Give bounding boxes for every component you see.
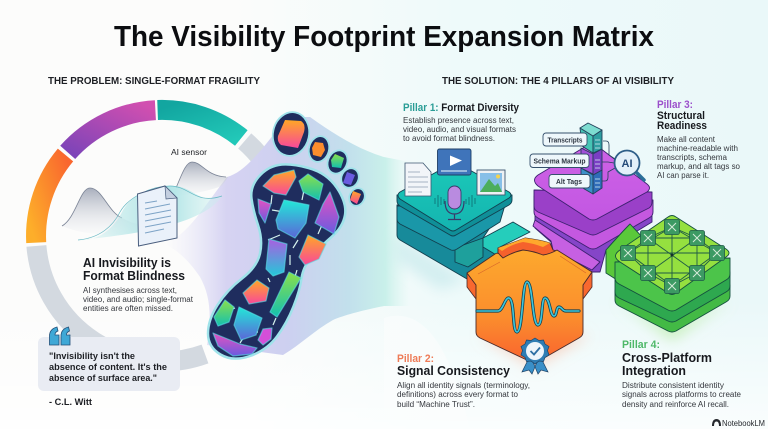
icon: stacked servers bbox=[580, 123, 602, 194]
pillar 2 text: definitions) across every format to bbox=[397, 390, 519, 399]
icon: AI magnifier: AI bbox=[622, 158, 632, 170]
text: AI invisibility description: entities are often missed. bbox=[83, 304, 173, 313]
green rear shelf bbox=[606, 224, 645, 285]
icon: video player bbox=[438, 149, 471, 175]
green top face bbox=[616, 216, 729, 294]
pillar 1 text bbox=[403, 102, 519, 143]
heading: the solution: THE SOLUTION: THE 4 PILLARS OF AI VISIBILITY bbox=[442, 76, 674, 87]
text: AI invisibility description: AI synthesises across text, bbox=[83, 286, 177, 295]
light beam through footprint bbox=[163, 117, 410, 355]
title: The Visibility Footprint Expansion Matrix bbox=[114, 21, 654, 53]
pillar 4 text: Pillar 4: bbox=[622, 339, 660, 351]
icon: text document bbox=[405, 163, 431, 196]
pillar 4 text: signals across platforms to create bbox=[622, 390, 742, 399]
teal top face bbox=[398, 163, 511, 231]
pillar 4 text: Integration bbox=[622, 363, 686, 378]
label: transcripts: Transcripts bbox=[548, 136, 583, 144]
purple layer bbox=[534, 196, 653, 249]
heading: AI invisibility bbox=[83, 255, 185, 283]
icon: verification badge bbox=[521, 338, 549, 374]
pillar 1 text: Establish presence across text, bbox=[403, 116, 514, 125]
icon: image bbox=[477, 170, 505, 195]
orange arched block bbox=[498, 238, 557, 262]
pillar 2 text: build “Machine Trust”. bbox=[397, 400, 475, 409]
pillar 1 text: Pillar 1: Format Diversity bbox=[403, 102, 519, 114]
pillar 3: data stack and labels bbox=[530, 123, 644, 194]
pillar 4 text: density and reinforce AI recall. bbox=[622, 400, 729, 409]
foot sole bbox=[208, 164, 345, 359]
pillar 3 text: Make all content bbox=[657, 135, 716, 144]
pillar 3 text: markup, and alt tags so bbox=[657, 162, 741, 171]
icon: quote marks bbox=[50, 327, 70, 345]
soft glows beneath platforms bbox=[397, 235, 730, 368]
pillar 1 text: to avoid format blindness. bbox=[403, 134, 495, 143]
pillar 1 text: video, audio, and visual formats bbox=[403, 125, 516, 134]
quote attribution: - C.L. Witt bbox=[49, 397, 92, 407]
text: AI invisibility description: video, and audio; single-format bbox=[83, 295, 194, 304]
foot toes bbox=[269, 109, 368, 208]
purple shelf bbox=[533, 220, 600, 270]
pillar 1 icons bbox=[405, 149, 505, 220]
teal upper rim bbox=[397, 195, 512, 236]
pillar 2 text bbox=[397, 353, 530, 409]
teal side panel bbox=[455, 238, 483, 267]
pillar 4 network graph bbox=[620, 220, 724, 294]
pillar 3 text: transcripts, schema bbox=[657, 153, 728, 162]
AI sensor waveforms bbox=[62, 162, 228, 240]
panel: quote: absence of surface area." bbox=[49, 373, 157, 383]
pillar 3 text: Readiness bbox=[657, 120, 707, 132]
pillar 3 platform: purple stack bbox=[533, 144, 653, 272]
pillar 3 text bbox=[657, 99, 741, 180]
orange side tabs bbox=[467, 272, 592, 299]
connectors bbox=[225, 190, 322, 343]
pillar 4 text: Cross-Platform bbox=[622, 350, 712, 365]
panel: quote bbox=[38, 327, 180, 391]
foot blocks bbox=[213, 170, 339, 356]
icon: microphone bbox=[435, 186, 475, 220]
purple base bbox=[535, 205, 652, 272]
label: alt tags: Alt Tags bbox=[556, 177, 582, 186]
label: schema markup: Schema Markup bbox=[534, 156, 586, 166]
pillar 2 text: Pillar 2: bbox=[397, 353, 434, 365]
heading: the problem: THE PROBLEM: SINGLE-FORMAT FRAGILITY bbox=[48, 76, 260, 87]
orange hexagon face bbox=[467, 250, 592, 363]
NotebookLM watermark: NotebookLM bbox=[722, 419, 765, 428]
purple top face bbox=[534, 144, 650, 220]
text: AI invisibility description bbox=[83, 286, 194, 313]
label: AI sensor: AI sensor bbox=[171, 148, 207, 157]
panel: quote: "Invisibility isn't the bbox=[49, 351, 135, 361]
heading: AI invisibility: AI Invisibility is bbox=[83, 255, 171, 270]
panel: quote: absence of content. It's the bbox=[49, 362, 167, 372]
pillar 4 text: Distribute consistent identity bbox=[622, 381, 724, 390]
pillar 3 text: Structural bbox=[657, 110, 705, 122]
pillar 4 text bbox=[622, 339, 742, 409]
teal bottom layer bbox=[397, 205, 505, 279]
toe blocks bbox=[278, 120, 361, 204]
pillar 1 platform: teal stack bbox=[397, 163, 530, 279]
teal connector block bbox=[483, 222, 530, 256]
teal middle layer bbox=[397, 205, 505, 250]
pillar 2 signal waveform bbox=[477, 282, 579, 332]
pillar 3 text: AI can parse it. bbox=[657, 171, 709, 180]
heading: AI invisibility: Format Blindness bbox=[83, 268, 185, 283]
pillar 3 text: Pillar 3: bbox=[657, 99, 693, 111]
pillar 2 text: Align all identity signals (terminology, bbox=[397, 381, 530, 390]
pillar 3 text: machine-readable with bbox=[657, 144, 738, 153]
pillar 2 text: Signal Consistency bbox=[397, 363, 511, 378]
ring chart: format coverage bbox=[36, 110, 269, 362]
pillar 4 platform: green stack bbox=[606, 216, 730, 332]
footprint bbox=[208, 109, 368, 359]
pillar 2 platform: orange hexagon bbox=[467, 238, 592, 363]
icon: document bbox=[138, 186, 177, 246]
